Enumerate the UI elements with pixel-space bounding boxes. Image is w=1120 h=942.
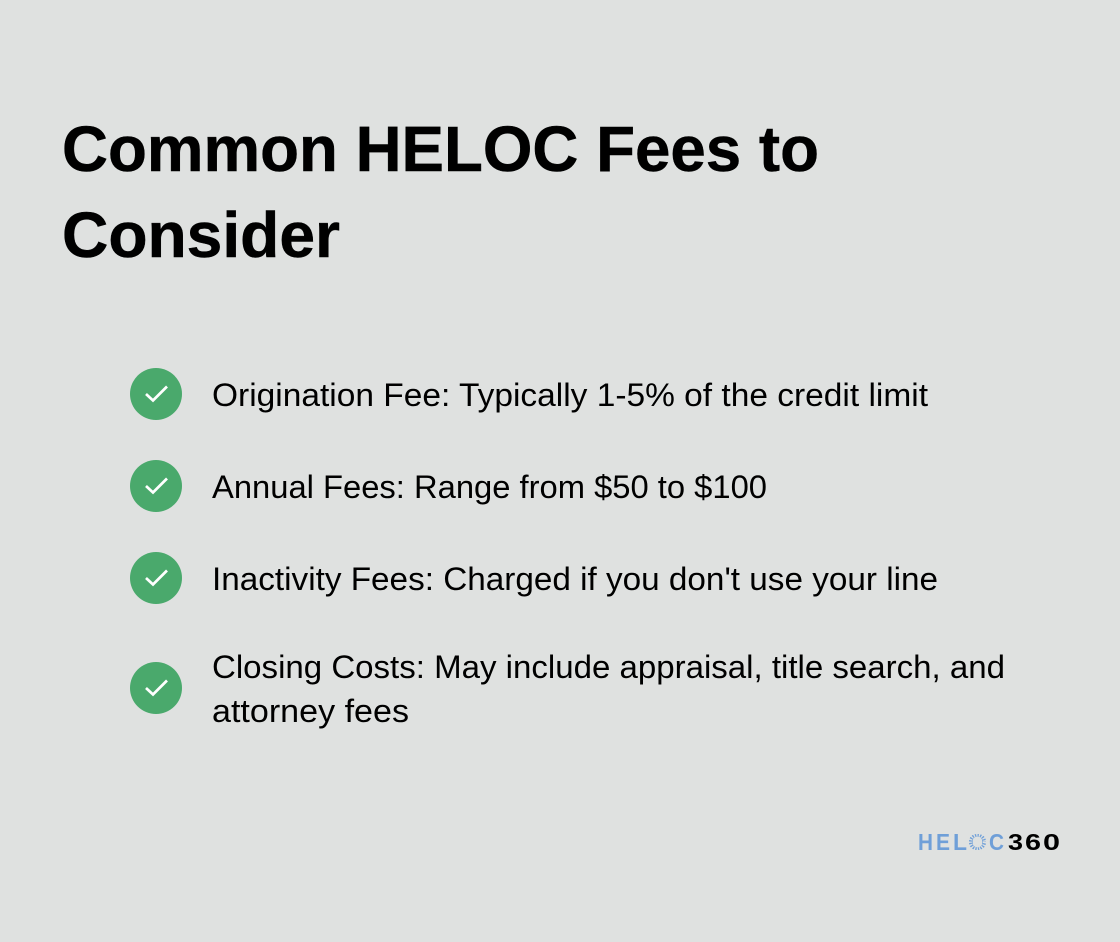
logo: HELOC360: H: [918, 829, 933, 855]
logo: HELOC360: L: [953, 829, 967, 855]
list item: annual fees: Annual Fees: Range from $50 to $100: [212, 469, 767, 505]
logo: HELOC360: [918, 829, 1060, 855]
icon: green check: [130, 662, 182, 714]
title: Consider: [62, 199, 340, 271]
list item: inactivity fees: [130, 552, 938, 604]
icon: green check: [130, 552, 182, 604]
logo: HELOC360: 0: [1043, 829, 1060, 855]
list item: closing costs: Closing Costs: May include appraisal, title search, and: [212, 649, 1005, 685]
title: Common HELOC Fees to: [62, 113, 819, 185]
logo: HELOC360: O: [968, 829, 987, 855]
logo: HELOC360: 3: [1008, 829, 1023, 855]
list item: annual fees: [130, 460, 767, 512]
list item: origination fee: [130, 368, 928, 420]
list item: closing costs: attorney fees: [212, 693, 409, 729]
list item: origination fee: Origination Fee: Typically 1-5% of the credit limit: [212, 377, 928, 413]
title: [62, 113, 819, 271]
logo: HELOC360: C: [989, 829, 1004, 855]
icon: green check: [130, 460, 182, 512]
list item: inactivity fees: Inactivity Fees: Charged if you don't use your line: [212, 561, 938, 597]
logo: HELOC360: 6: [1025, 829, 1041, 855]
icon: green check: [130, 368, 182, 420]
list item: closing costs: [130, 649, 1005, 729]
logo: HELOC360: E: [936, 829, 950, 855]
